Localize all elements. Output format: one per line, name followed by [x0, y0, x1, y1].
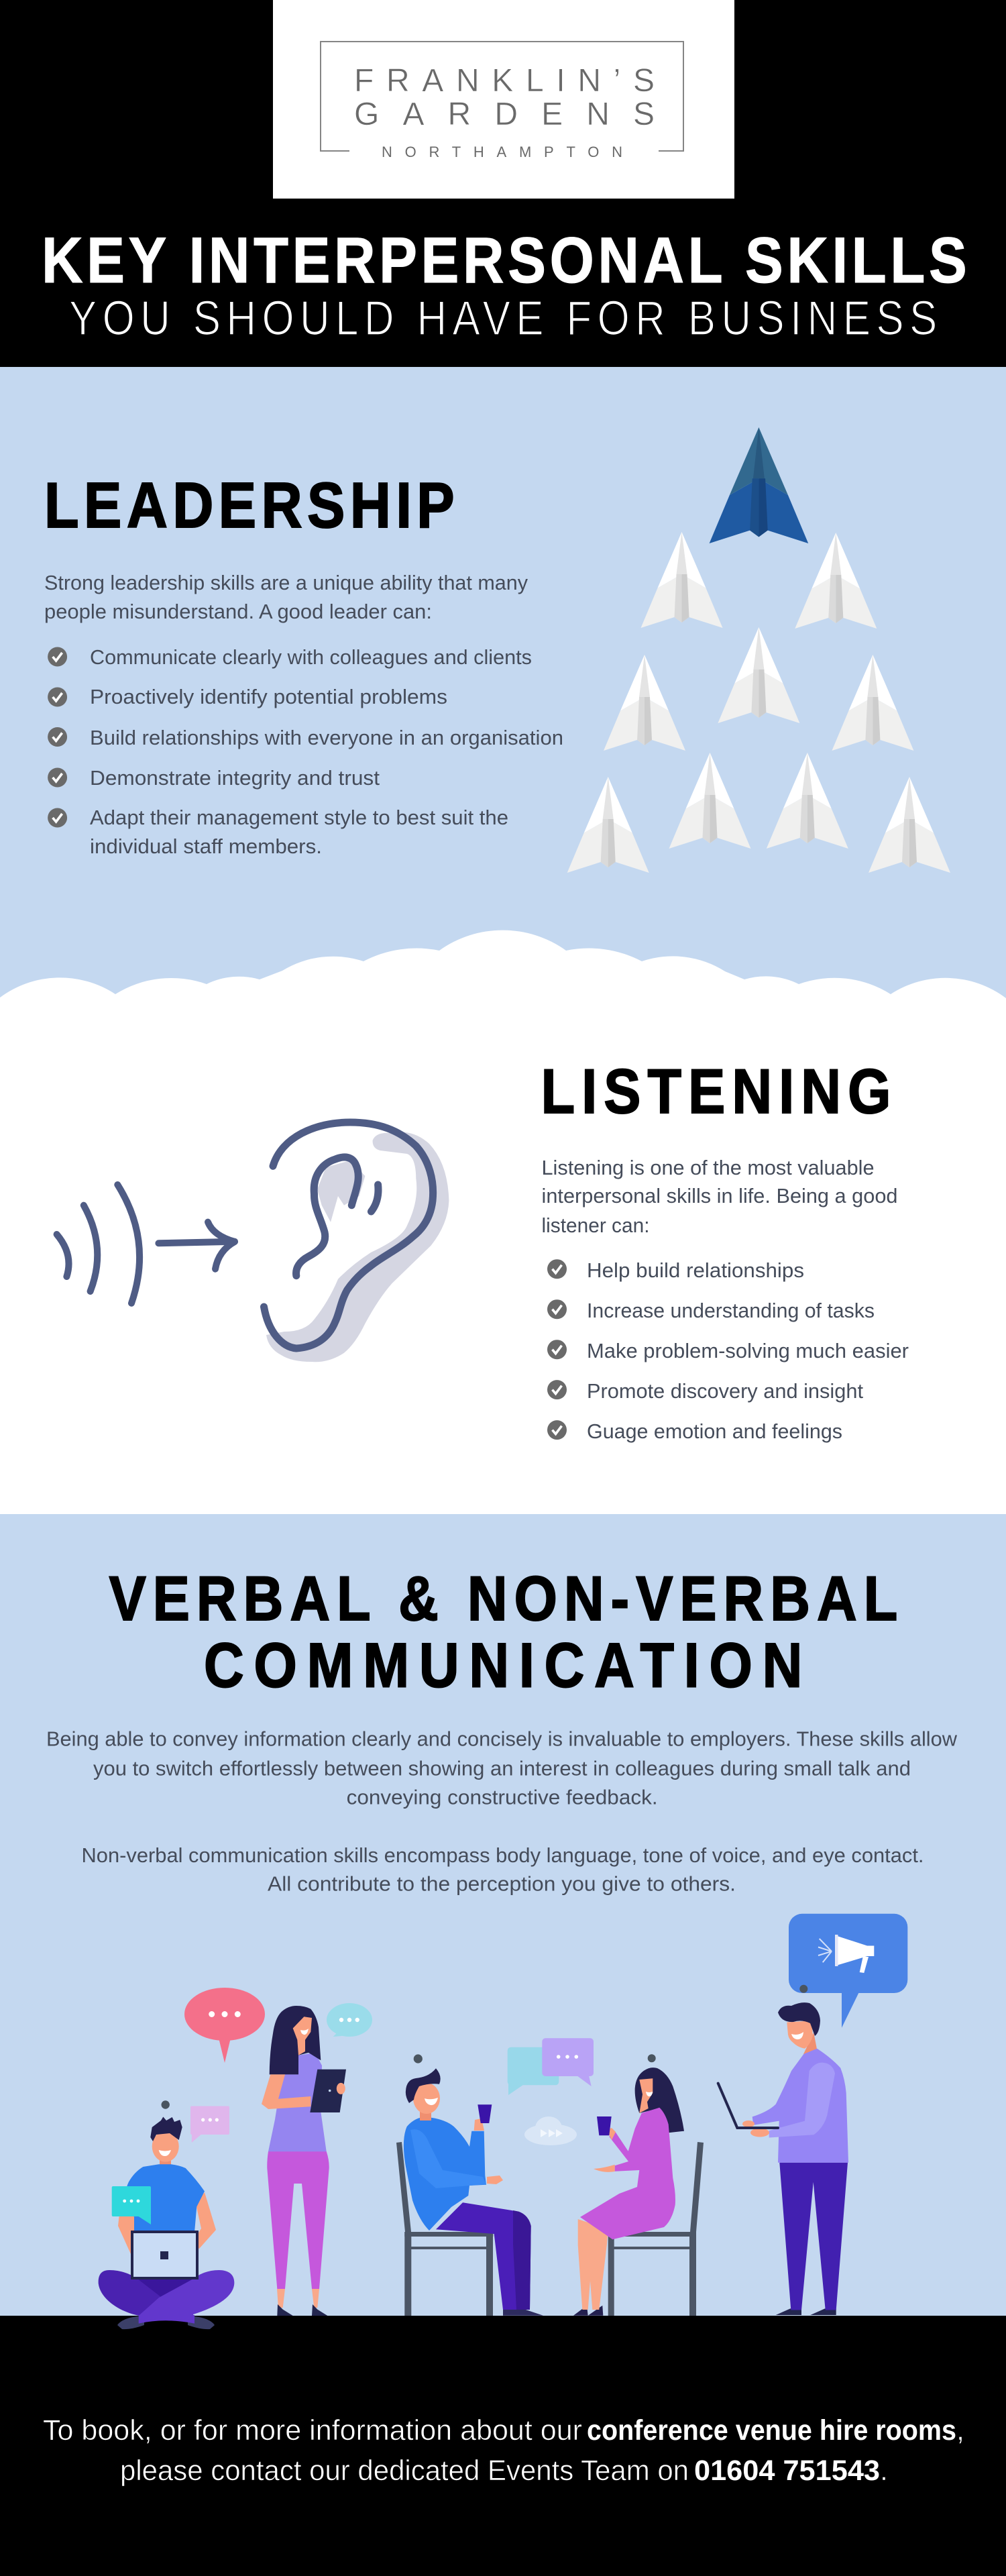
heading: communication: COMMUNICATION [204, 1630, 802, 1701]
logo: Franklin's Gardens: NORTHAMPTON [382, 144, 622, 160]
figure: man standing with laptop [718, 2002, 848, 2315]
text: leadership intro: people misunderstand. A good leader can: [44, 600, 432, 623]
list: listening points: Make problem-solving much easier [587, 1339, 909, 1362]
list: listening points: Increase understanding of tasks [587, 1299, 875, 1322]
text: non-verbal paragraph: Non-verbal communication skills encompass body language, tone of voice, and eye contact. [82, 1843, 924, 1867]
heading: listening: LISTENING [541, 1056, 891, 1126]
figure: woman standing with tablet [262, 2006, 346, 2316]
icon: centre speech bubbles [508, 2038, 594, 2095]
list: leadership points: Proactively identify potential problems [90, 685, 447, 708]
text: listening intro: Listening is one of the most valuable [542, 1156, 875, 1179]
icon: ear [264, 1122, 449, 1362]
heading: leadership: LEADERSHIP [44, 470, 455, 541]
text: booking call to action [43, 2414, 964, 2487]
list: leadership points: Communicate clearly with colleagues and clients [90, 645, 532, 669]
text: booking call to action: To book, or for more information about our [43, 2414, 582, 2447]
shoes overlapping footer [117, 2315, 215, 2329]
icon: white paper planes [567, 532, 950, 873]
chair: left [396, 2142, 493, 2316]
list: listening points: Promote discovery and insight [587, 1379, 863, 1403]
subtitle: YOU SHOULD HAVE FOR BUSINESS [69, 292, 937, 345]
list: listening points [547, 1258, 909, 1443]
text: verbal paragraph: Being able to convey information clearly and concisely is invaluable to employers. These skills allow [46, 1727, 958, 1751]
chair: right [608, 2142, 704, 2316]
list: listening points: Guage emotion and feelings [587, 1419, 842, 1443]
text: leadership intro [44, 571, 528, 623]
logo: Franklin's Gardens: FRANKLIN’S [354, 63, 655, 99]
text: verbal paragraph: conveying constructive feedback. [347, 1785, 658, 1809]
icon: megaphone speech bubble [789, 1914, 907, 2028]
text: verbal paragraph [46, 1727, 958, 1809]
icon: centre cloud [524, 2116, 577, 2145]
icon: pink speech bubble [190, 2106, 229, 2143]
text: listening intro: interpersonal skills in life. Being a good [542, 1184, 897, 1208]
panel: communication [0, 1514, 1006, 2329]
text: listening intro: listener can: [542, 1214, 649, 1237]
text: listening intro [542, 1156, 897, 1237]
text: booking call to action: conference venue hire rooms [587, 2414, 956, 2447]
text: non-verbal paragraph: All contribute to the perception you give to others. [268, 1872, 736, 1896]
text: leadership intro: Strong leadership skills are a unique ability that many [44, 571, 528, 594]
figure: seated man with cup [404, 2054, 543, 2316]
panel: footer [0, 2315, 1006, 2576]
list: leadership points: individual staff members. [90, 835, 322, 858]
text: non-verbal paragraph [82, 1843, 924, 1896]
panel: header [0, 0, 1006, 367]
icon: cyan speech bubble [327, 2003, 372, 2037]
text: booking call to action: , [956, 2414, 964, 2447]
figure: man sitting with laptop [99, 2100, 234, 2329]
icon: blue lead paper plane [710, 427, 808, 543]
heading: communication: VERBAL & NON-VERBAL [109, 1563, 897, 1633]
logo: Franklin's Gardens [273, 0, 734, 199]
text: booking call to action: 01604 751543 [694, 2455, 880, 2487]
text: booking call to action: please contact our dedicated Events Team on [120, 2455, 689, 2487]
text: booking call to action: . [880, 2455, 888, 2487]
list: leadership points: Demonstrate integrity and trust [90, 766, 380, 790]
list: listening points: Help build relationships [587, 1258, 804, 1282]
figure: seated woman with cup [573, 2054, 684, 2316]
logo: Franklin's Gardens: GARDENS [354, 97, 655, 132]
panel: listening [0, 930, 1006, 1514]
panel: leadership [0, 367, 1006, 1011]
heading: communication [109, 1563, 897, 1701]
icon: red speech bubble [184, 1988, 265, 2063]
title: KEY INTERPERSONAL SKILLS [42, 224, 967, 297]
text: verbal paragraph: you to switch effortlessly between showing an interest in colleagues during small talk and [93, 1756, 911, 1780]
arrow [158, 1222, 235, 1269]
list: leadership points: Adapt their management style to best suit the [90, 806, 508, 829]
list: leadership points [48, 645, 563, 858]
list: leadership points: Build relationships with everyone in an organisation [90, 726, 563, 749]
icon: sound waves [57, 1185, 139, 1303]
